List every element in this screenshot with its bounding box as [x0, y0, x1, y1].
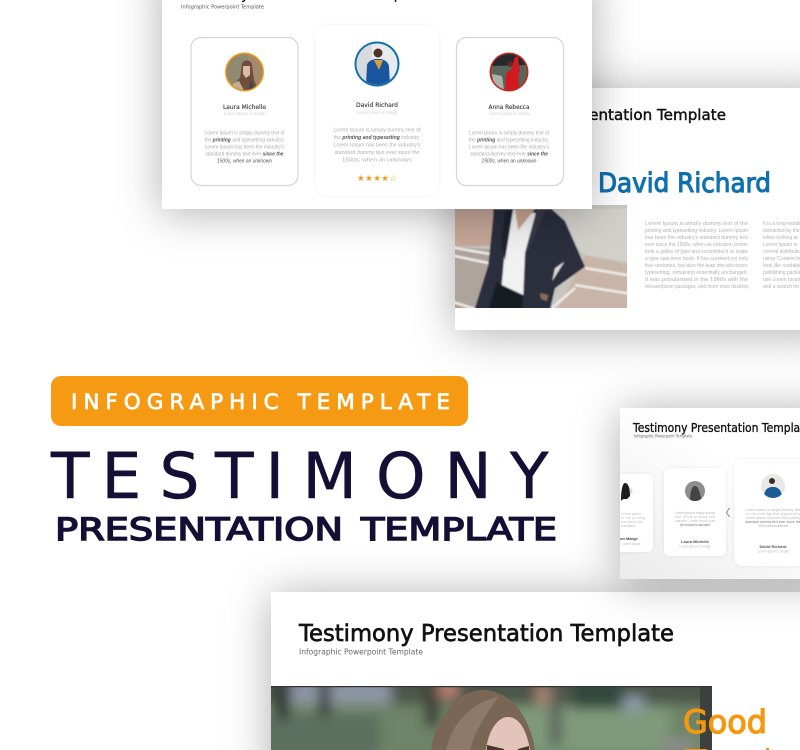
star rating: ★★★★☆	[357, 174, 397, 184]
card: Laura Michelle greyed: Lorem ipsum is simply	[679, 544, 711, 548]
name: Anna Rebecca	[488, 103, 530, 111]
card: David Richard: of the printing and typesetting	[746, 512, 800, 516]
panel: lower slide with woman photo	[250, 592, 800, 750]
quote: standard dummy text ever since the	[334, 150, 420, 156]
body column 1: printing and typesetting industry. Lorem Ipsum	[645, 228, 748, 234]
body column 1: typesetting, remaining essentially unchanged.	[645, 270, 748, 276]
quote: standard dummy text ever since the	[470, 152, 548, 158]
card: Laura Michelle greyed: Laura Michelle	[681, 539, 710, 544]
card: David Richard: Lorem Ipsum has been the industry	[746, 516, 800, 520]
card: left testimonial: standard	[621, 524, 635, 528]
panel: slide with carousel of testimonials	[600, 408, 800, 579]
card: left testimonial: has been the	[621, 520, 643, 524]
main title: TESTIMONY	[50, 440, 549, 513]
avatar: Anna	[490, 52, 530, 92]
card: David Richard: Lorem Ipsum is simply dummy text	[746, 508, 800, 512]
card: Laura Michelle greyed: the industry's standard	[680, 523, 710, 527]
quote: Lorem Ipsum has been the industry's	[204, 144, 285, 150]
panel: three testimonial cards slide	[162, 0, 592, 209]
quote: the printing and typesetting industry.	[204, 138, 284, 144]
card: left testimonial: Lorem Ipsum	[621, 512, 641, 516]
badge: infographic template	[51, 376, 468, 426]
avatar: David	[354, 42, 400, 86]
quote: 1500s, when an unknown	[482, 158, 537, 164]
body column 2	[763, 221, 800, 290]
body column 2: and a search for	[763, 284, 799, 290]
arrow: previous	[726, 508, 730, 517]
role: Lorem ipsum is simply	[356, 110, 398, 115]
quote	[204, 130, 285, 164]
slide subtitle: Infographic Powerpoint Template	[181, 4, 265, 10]
name: David Richard	[356, 101, 398, 109]
quote: Lorem Ipsum is simply dummy text of	[204, 130, 285, 136]
main subtitle: PRESENTATION	[55, 512, 343, 548]
slide subtitle: Infographic Powerpoint Template	[634, 434, 692, 438]
slide title: Testimony Presentation Template	[298, 621, 674, 647]
quote	[334, 128, 421, 164]
heading: David Richard: David Richard	[598, 168, 771, 199]
body column 1: ever since the 1500s, when an unknown printer	[645, 242, 748, 248]
quote: Lorem Ipsum has been the industry's	[469, 144, 549, 150]
card: left testimonial: Lorem ipsum	[622, 542, 641, 546]
photo: man in blazer	[455, 205, 627, 308]
role: Lorem ipsum is simply	[224, 111, 266, 116]
panel: David Richard slide	[450, 88, 800, 330]
card: David Richard featured	[315, 25, 439, 196]
body column 1: has been the industry's standard dummy text	[645, 235, 749, 241]
card: David Richard: David Richard	[760, 544, 787, 549]
main subtitle: TEMPLATE	[360, 512, 557, 548]
quote: Lorem Ipsum is simply dummy text of	[334, 128, 421, 134]
body column 1: five centuries, but also the leap into electronic	[645, 263, 749, 269]
quote: standard dummy text ever since the	[206, 152, 284, 158]
role: Lorem ipsum is simply	[488, 111, 530, 116]
card: Anna Rebecca	[456, 38, 564, 186]
slide title (partly hidden): Testimony Presentation Template	[475, 106, 726, 124]
heading: Good: Good	[683, 703, 767, 741]
body column 2: Lorem Ipsum is	[763, 242, 798, 248]
quote: Lorem Ipsum has been the industry's	[334, 142, 421, 148]
body column 1: It was popularised in the 1960s with the	[645, 277, 748, 283]
avatar: Laura	[225, 52, 264, 92]
card: left testimonial	[620, 474, 654, 552]
body column 1: Lorem Ipsum is simply dummy text of the	[645, 221, 748, 227]
body column 1: releaseIpsum passages, and more recie desktop	[645, 284, 748, 290]
card: David Richard: Lorem ipsum is simply	[757, 550, 789, 554]
card: David Richard	[734, 459, 800, 566]
quote: 1500s, when an unknown	[217, 158, 272, 164]
slide subtitle: Infographic Powerpoint Template	[299, 648, 423, 656]
name: Laura Michelle	[223, 103, 266, 111]
quote: 1500s, when an unknown	[342, 158, 412, 164]
body column 2: distracted by the	[763, 228, 800, 234]
quote: the printing and typesetting industry.	[469, 138, 549, 144]
card: Laura Michelle greyed: Lorem Ipsum is simply dummy	[675, 511, 715, 515]
body column 2: when looking at	[763, 235, 798, 241]
body column 1	[645, 221, 749, 290]
card: left testimonial: on Marge	[620, 536, 639, 541]
card: Laura Michelle greyed: text of the printing and	[675, 515, 715, 519]
card: Laura Michelle greyed: industry. Lorem Ipsum has	[675, 519, 715, 523]
quote: the printing and typesetting industry.	[334, 135, 420, 141]
quote	[469, 130, 550, 164]
main subtitle	[55, 512, 557, 548]
card: Laura Michelle	[191, 38, 298, 186]
clipped orange letter tops	[685, 748, 769, 750]
photo: woman in park	[271, 686, 712, 750]
card: left testimonial: of the printing	[621, 516, 645, 520]
quote: Lorem Ipsum is simply dummy text of	[469, 130, 550, 136]
body column 1: took a galley of type and scrambled it to make	[645, 249, 748, 255]
badge: infographic template: INFOGRAPHIC TEMPLATE	[71, 390, 450, 415]
body column 1: a type specimen book. It has survived not only	[645, 256, 748, 262]
card: David Richard: standard dummy text ever since the	[746, 520, 800, 524]
card: Laura Michelle greyed	[664, 468, 726, 556]
card: David Richard: 1500s, when an unknown	[758, 524, 788, 528]
